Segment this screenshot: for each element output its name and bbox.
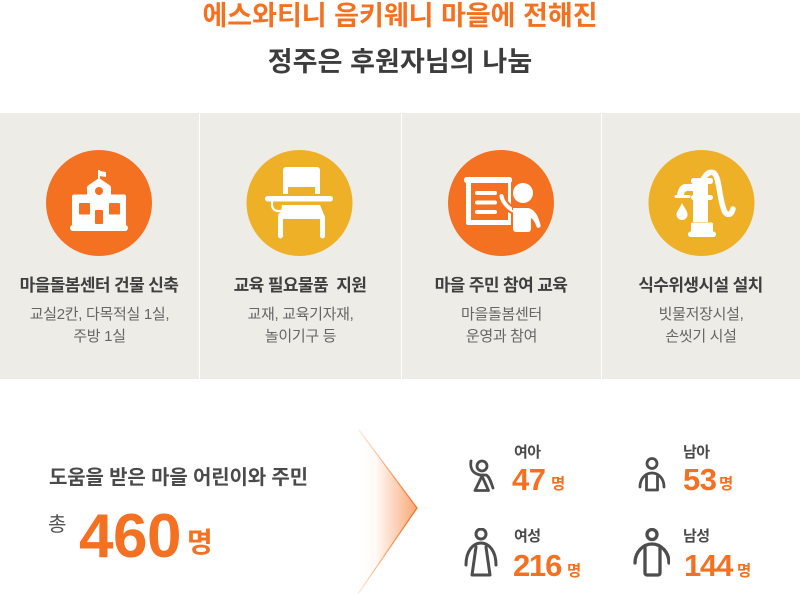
icon: boy [638, 457, 666, 492]
icon: woman [464, 528, 498, 576]
label: 남아 [683, 444, 710, 461]
description: 주방 1실 [73, 328, 126, 345]
icon: water pump [648, 150, 754, 256]
panel: resident education [402, 113, 601, 379]
title: orange headline: 에스와티니 음키웨니 마을에 전해진 [202, 1, 598, 31]
unit: 명 [567, 563, 581, 580]
total number: 460 [79, 502, 181, 571]
icon: school building [46, 150, 152, 256]
description: 놀이기구 등 [265, 328, 336, 345]
description [247, 306, 354, 345]
label: 여성 [514, 528, 541, 545]
value: 53 [683, 462, 716, 497]
arrow: gradient chevron [358, 430, 418, 594]
unit: 명 [551, 476, 565, 493]
title: dark headline: 정주은 후원자님의 나눔 [268, 47, 532, 77]
subheading: beneficiaries: 도움을 받은 마을 어린이와 주민 [49, 467, 308, 489]
description: 운영과 참여 [466, 328, 537, 345]
heading: 마을돌봄센터 건물 신축 [20, 276, 178, 295]
panel: new village care center [0, 113, 199, 379]
total unit: 명 [187, 527, 213, 558]
value: 144 [684, 548, 732, 583]
label: 남성 [683, 528, 710, 545]
icon: girl [469, 460, 494, 492]
description: 손씻기 시설 [665, 328, 737, 345]
panel: educational supplies [200, 113, 401, 379]
label: 여아 [514, 444, 541, 461]
description [659, 306, 743, 345]
heading: 교육 필요물품 지원 [234, 276, 366, 295]
description [30, 306, 169, 345]
unit: 명 [719, 476, 733, 493]
description: 교실2칸, 다목적실 1실, [30, 306, 169, 323]
stat: boys [638, 444, 733, 497]
value: 47 [512, 462, 545, 497]
icon: man [633, 528, 670, 577]
description: 빗물저장시설, [659, 306, 743, 323]
value: 216 [513, 548, 561, 583]
icon: teacher at board [448, 150, 554, 256]
heading: 식수위생시설 설치 [638, 276, 763, 295]
total label: 총 [48, 514, 66, 536]
description: 마을돌봄센터 [461, 306, 542, 323]
stat: girls [469, 444, 565, 497]
description: 교재, 교육기자재, [247, 306, 354, 323]
heading: 마을 주민 참여 교육 [435, 276, 567, 295]
description [461, 306, 542, 345]
panel: drinking water facilities [602, 113, 800, 379]
stat: women [464, 528, 581, 583]
unit: 명 [737, 563, 751, 580]
icon: school desk chair [246, 150, 352, 256]
stat: men [633, 528, 751, 583]
